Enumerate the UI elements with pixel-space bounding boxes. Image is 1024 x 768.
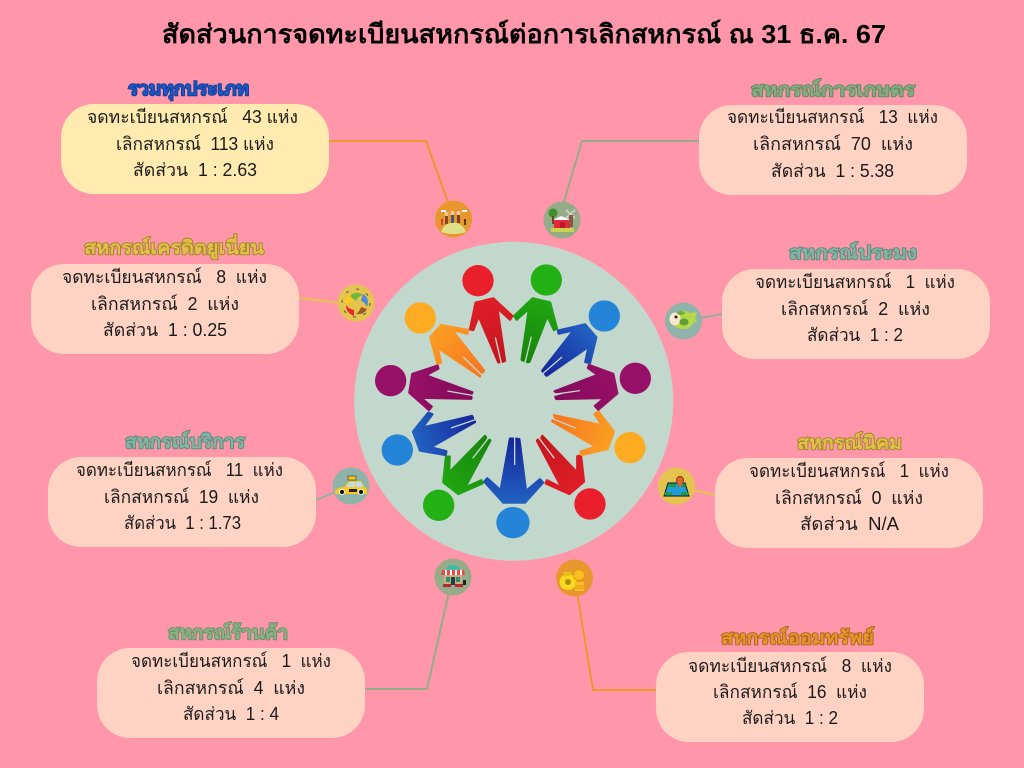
panel: store bbox=[97, 622, 365, 738]
panel: service bbox=[48, 431, 316, 547]
person: green top bbox=[514, 264, 562, 366]
panel: service: เลิกสหกรณ์ 19 แห่ง bbox=[104, 487, 259, 507]
panel: fishery bbox=[722, 242, 990, 359]
icon: farmers on globe bbox=[435, 200, 472, 238]
person: green lower left bbox=[423, 435, 491, 521]
panel: land settlement: สัดส่วน N/A bbox=[800, 514, 899, 534]
heading: land settlement: สหกรณ์นิคม bbox=[797, 432, 902, 454]
panel: fishery: จดทะเบียนสหกรณ์ 1 แห่ง bbox=[755, 272, 955, 292]
panel: land settlement: จดทะเบียนสหกรณ์ 1 แห่ง bbox=[749, 461, 949, 481]
panel: all types: เลิกสหกรณ์ 113 แห่ง bbox=[116, 134, 274, 154]
heading: all types: รวมทุกประเภท bbox=[128, 79, 249, 101]
heading: store: สหกรณ์ร้านค้า bbox=[168, 622, 288, 644]
panel: land settlement: เลิกสหกรณ์ 0 แห่ง bbox=[775, 488, 923, 508]
icon: shop front bbox=[434, 558, 472, 596]
heading: service: สหกรณ์บริการ bbox=[125, 431, 246, 453]
connector: agriculture bbox=[563, 141, 699, 205]
title: สัดส่วนการจดทะเบียนสหกรณ์ต่อการเลิกสหกรณ์ ณ 31 ธ.ค. 67 bbox=[162, 19, 886, 49]
icon: green fish bbox=[665, 302, 702, 340]
panel: credit union: เลิกสหกรณ์ 2 แห่ง bbox=[91, 294, 239, 314]
person: orange upper left bbox=[405, 302, 484, 377]
connector: fishery bbox=[700, 314, 722, 318]
connector: all types bbox=[329, 141, 449, 205]
person: purple left bbox=[375, 365, 476, 410]
connector: store bbox=[365, 592, 449, 689]
panel: service: สัดส่วน 1 : 1.73 bbox=[124, 513, 241, 533]
panel: store: สัดส่วน 1 : 4 bbox=[183, 704, 279, 724]
panel: service: จดทะเบียนสหกรณ์ 11 แห่ง bbox=[76, 460, 283, 480]
panel: savings: เลิกสหกรณ์ 16 แห่ง bbox=[713, 682, 867, 702]
person: red top bbox=[462, 265, 512, 366]
icon: barn and tree bbox=[544, 202, 580, 238]
icon: yellow taxi bbox=[332, 468, 370, 504]
person: blue upper right bbox=[540, 300, 620, 376]
panel: credit union: จดทะเบียนสหกรณ์ 8 แห่ง bbox=[62, 267, 267, 287]
heading: credit union: สหกรณ์เครดิตยูเนี่ยน bbox=[84, 234, 264, 260]
heading: agriculture: สหกรณ์การเกษตร bbox=[751, 79, 916, 101]
icon: money bags and coins bbox=[556, 560, 593, 596]
icon: map with pin bbox=[658, 468, 695, 504]
panel: store: เลิกสหกรณ์ 4 แห่ง bbox=[157, 678, 305, 698]
person: blue bottom bbox=[484, 433, 543, 538]
panel: savings: สัดส่วน 1 : 2 bbox=[742, 708, 838, 728]
panel: all types: จดทะเบียนสหกรณ์ 43 แห่ง bbox=[87, 107, 298, 127]
panel: savings bbox=[656, 627, 924, 742]
person: red lower right bbox=[537, 436, 606, 520]
central circle with ring of people bbox=[354, 242, 673, 561]
icon: credit spiral bbox=[338, 284, 374, 322]
heading: fishery: สหกรณ์ประมง bbox=[789, 242, 917, 264]
panel: all types bbox=[61, 79, 329, 194]
panel: store: จดทะเบียนสหกรณ์ 1 แห่ง bbox=[131, 651, 331, 671]
panel: agriculture: สัดส่วน 1 : 5.38 bbox=[771, 161, 894, 181]
panel: land settlement bbox=[715, 432, 983, 548]
panel: savings: จดทะเบียนสหกรณ์ 8 แห่ง bbox=[688, 656, 892, 676]
connector: savings bbox=[577, 592, 656, 690]
panel: all types: สัดส่วน 1 : 2.63 bbox=[133, 160, 257, 180]
person: purple right bbox=[552, 363, 651, 410]
panel: agriculture: เลิกสหกรณ์ 70 แห่ง bbox=[753, 134, 913, 154]
panel: agriculture: จดทะเบียนสหกรณ์ 13 แห่ง bbox=[727, 107, 938, 127]
heading: savings: สหกรณ์ออมทรัพย์ bbox=[721, 627, 874, 649]
panel: fishery: เลิกสหกรณ์ 2 แห่ง bbox=[781, 299, 930, 319]
panel: credit union bbox=[31, 234, 299, 354]
panel: agriculture bbox=[699, 79, 967, 195]
connector: land settlement bbox=[693, 490, 715, 495]
person: orange right bbox=[549, 412, 646, 463]
person: blue left bbox=[382, 413, 478, 466]
connector: credit union bbox=[299, 298, 340, 303]
panel: credit union: สัดส่วน 1 : 0.25 bbox=[103, 320, 227, 340]
panel: fishery: สัดส่วน 1 : 2 bbox=[807, 325, 903, 345]
connector: service bbox=[316, 490, 340, 500]
